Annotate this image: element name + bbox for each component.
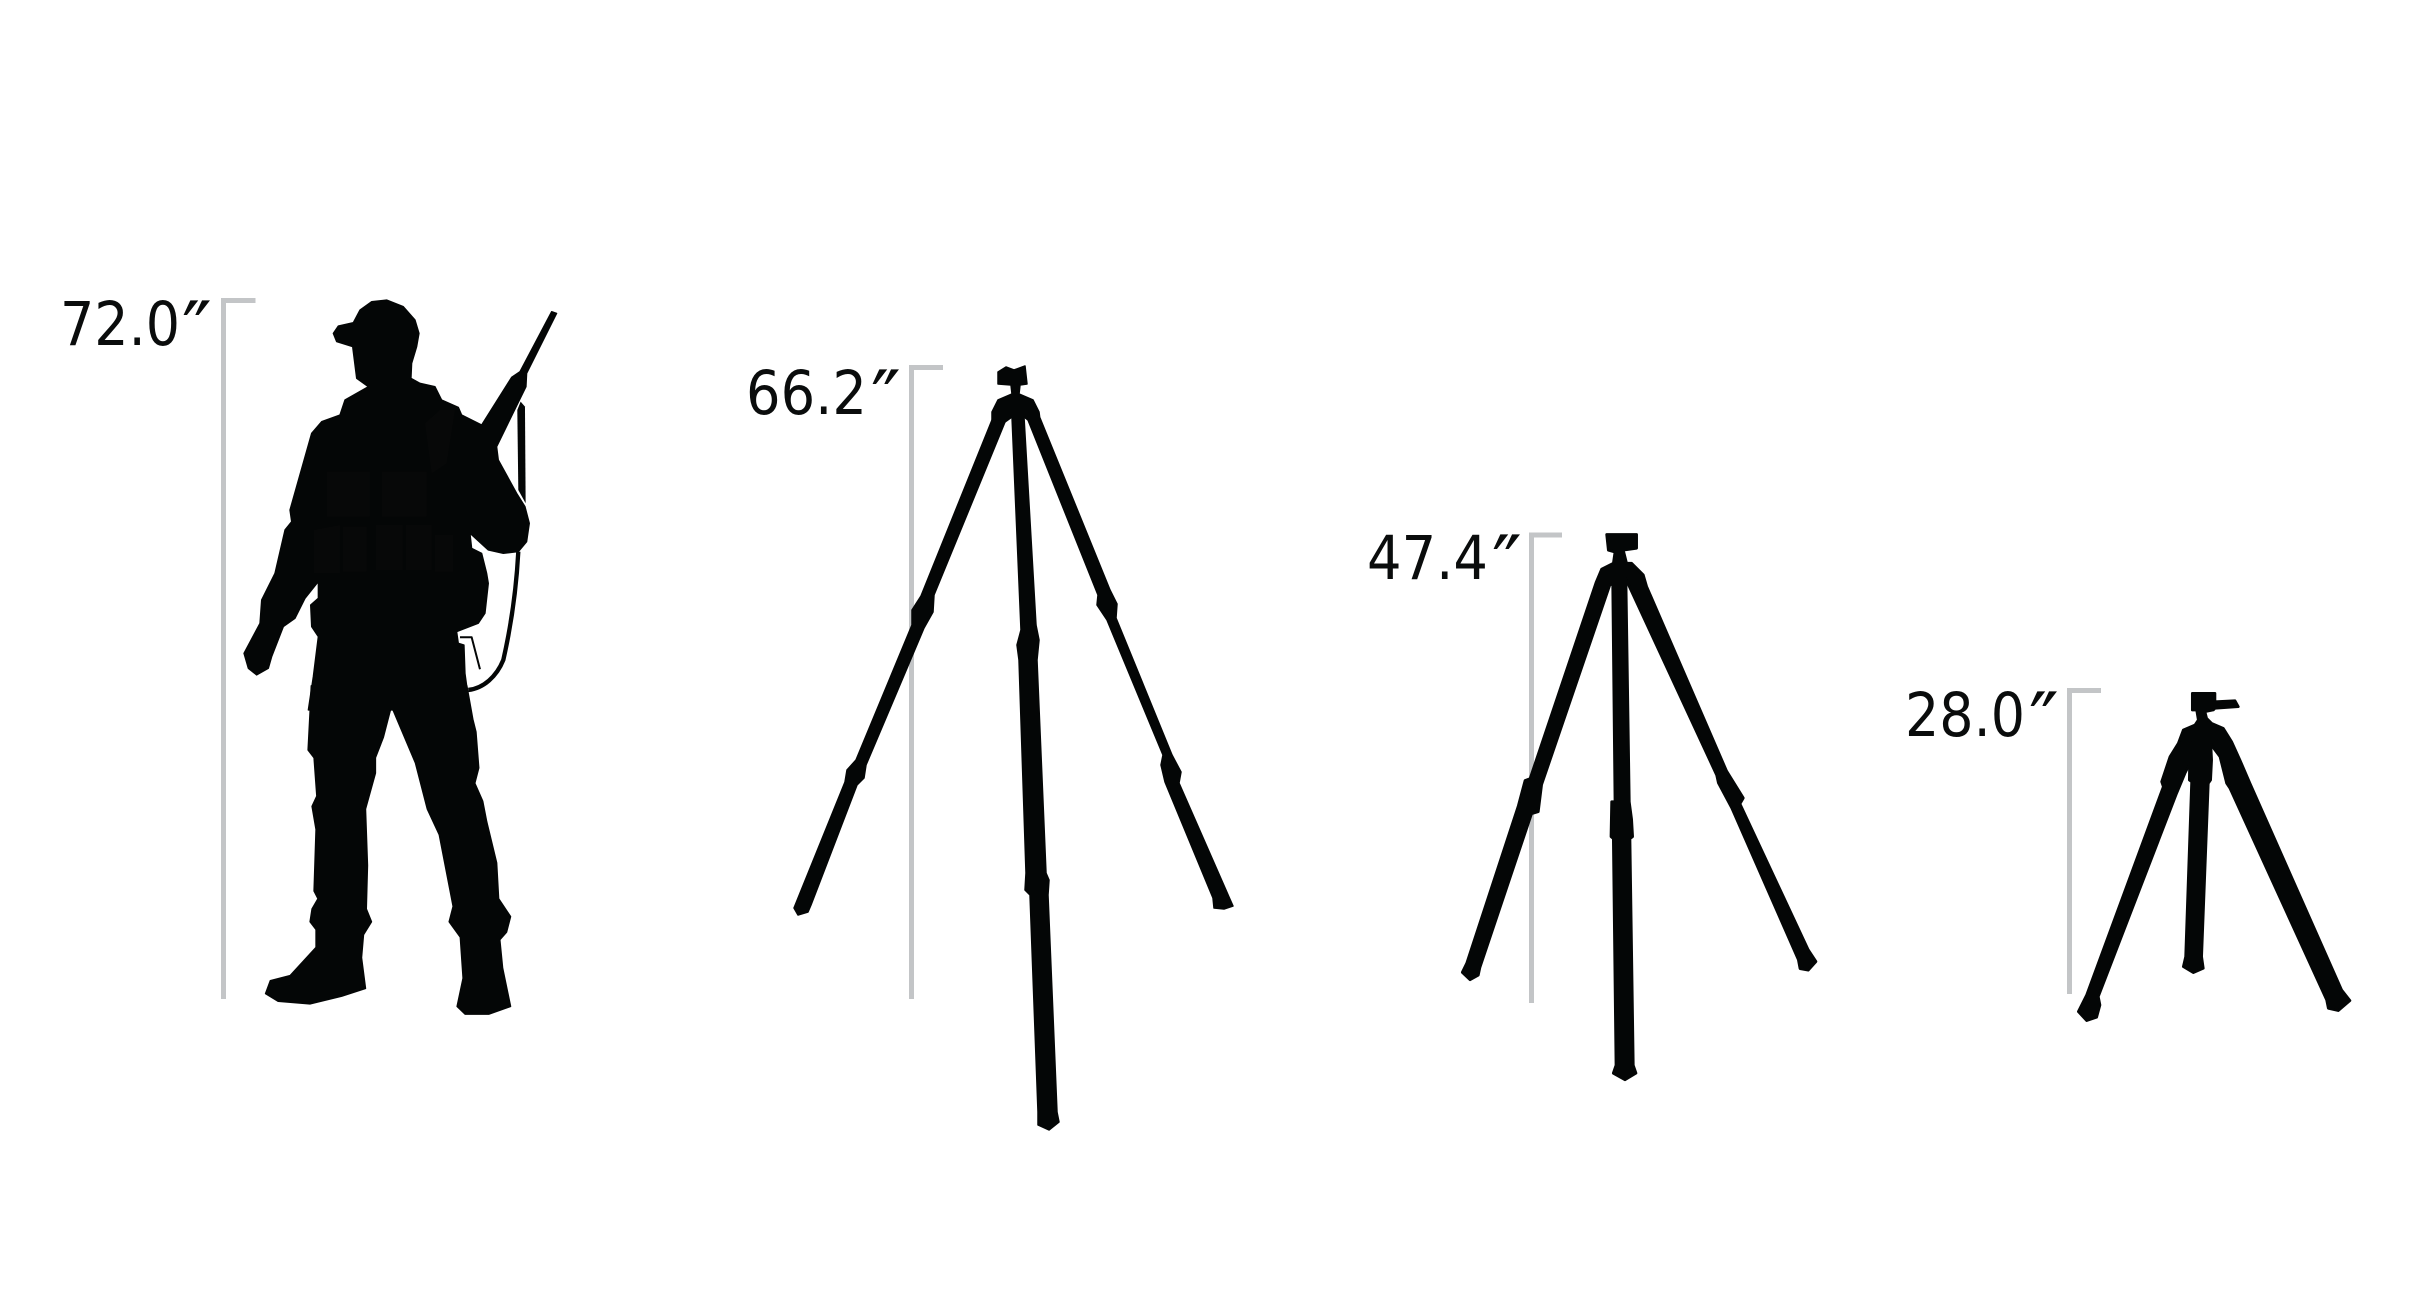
height bracket: 47.4: [1532, 535, 1562, 1003]
height bracket: 28.0: [2070, 690, 2101, 994]
icon: medium tripod silhouette: [1462, 535, 1816, 1080]
label: 72.0 inches: ″: [182, 285, 212, 378]
icon: compact tripod silhouette: [2078, 693, 2350, 1021]
icon: soldier silhouette: [244, 300, 557, 1014]
label: 66.2 inches: [746, 354, 901, 447]
height bracket: 66.2: [912, 368, 943, 999]
panel: tripod extended: [746, 354, 1233, 1130]
label: 72.0 inches: [60, 285, 212, 378]
label: 47.4 inches: [1367, 519, 1522, 612]
label: 47.4 inches: 47.4: [1367, 523, 1488, 594]
panel: person: [60, 285, 557, 1014]
icon: tall tripod silhouette: [794, 366, 1233, 1130]
label: 28.0 inches: ″: [2029, 676, 2059, 769]
label: 47.4 inches: ″: [1492, 519, 1522, 612]
label: 28.0 inches: [1905, 676, 2059, 769]
label: 66.2 inches: ″: [871, 354, 901, 447]
label: 28.0 inches: 28.0: [1905, 680, 2025, 751]
label: 66.2 inches: 66.2: [746, 358, 867, 429]
height bracket: person: [224, 300, 256, 999]
panel: tripod compact: [1905, 676, 2350, 1021]
label: 72.0 inches: 72.0: [60, 289, 180, 360]
panel: tripod medium: [1367, 519, 1816, 1080]
